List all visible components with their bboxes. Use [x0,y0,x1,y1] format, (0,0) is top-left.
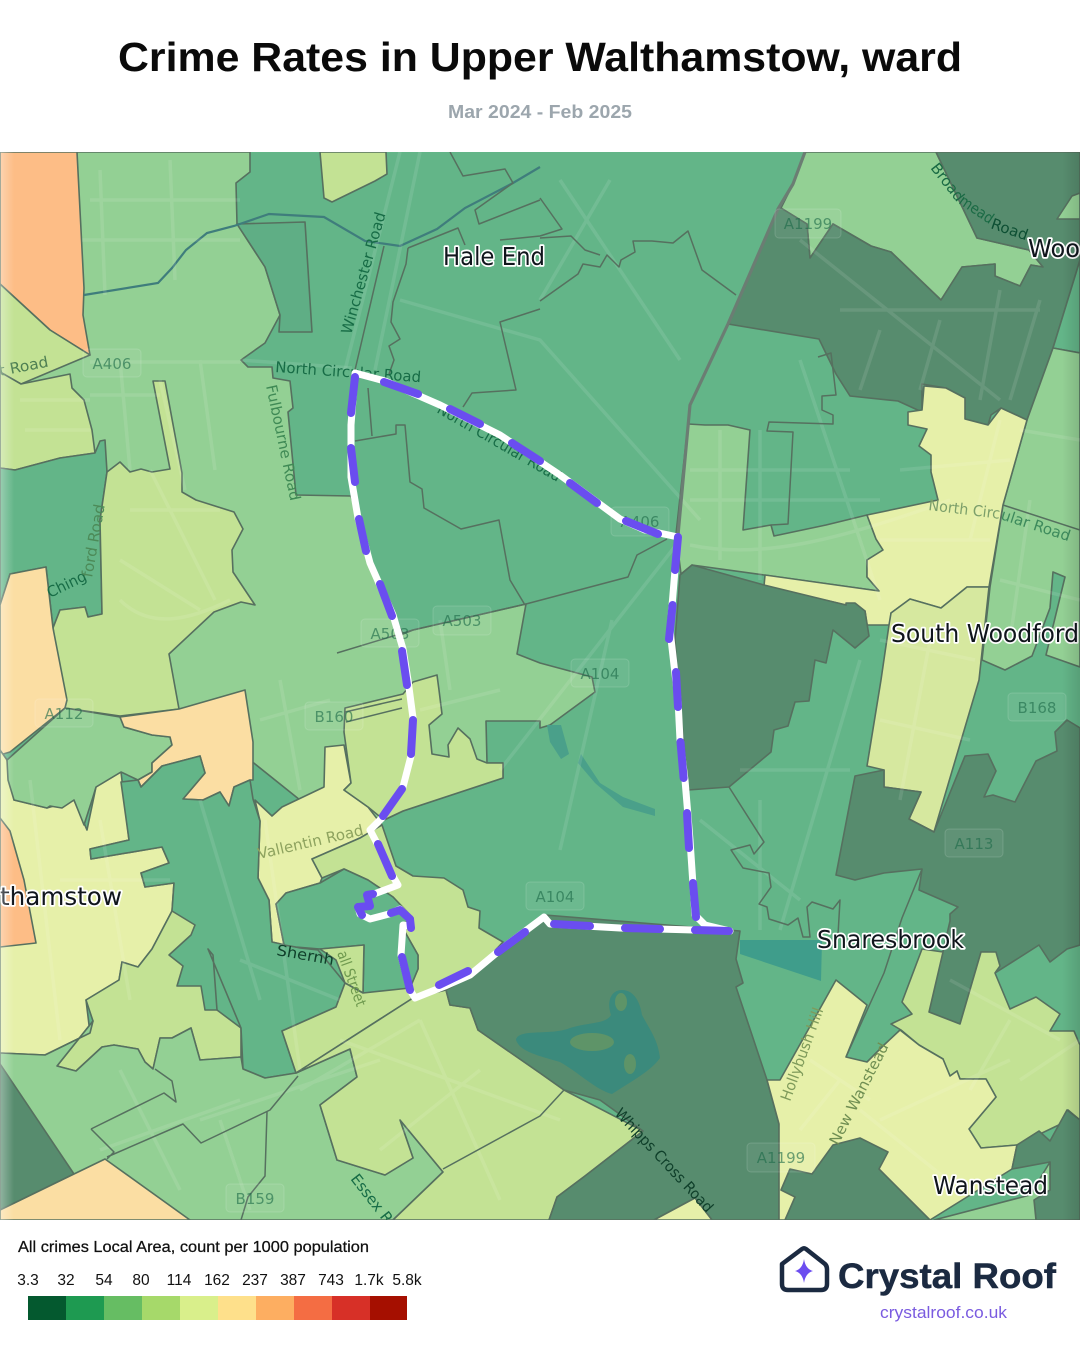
road name labels: ford Road [78,503,109,579]
place names: Hale End [443,242,545,271]
icon: house with star [780,1246,830,1292]
crime rate zones [0,152,1080,1220]
road name labels [0,159,1073,1227]
choropleth map [0,152,1080,1220]
road name labels: ular Road [999,506,1073,545]
road name labels: Broad [927,159,968,205]
road number shields: A1199 [757,1149,805,1167]
road number shields [35,209,1066,1212]
legend scale values: 162 [204,1272,230,1289]
road name labels: North Circular Road [275,358,422,386]
road name labels: North Circular Road [434,400,564,485]
legend scale values: 3.3 [17,1272,39,1289]
legend scale values: 80 [132,1272,150,1289]
internal ward boundaries [91,152,1080,1220]
road number shields: A104 [536,888,574,906]
legend scale values: 1.7k [354,1272,384,1289]
road name labels: New Wanstead [826,1040,892,1148]
road name labels: Whipps Cross Road [611,1104,717,1216]
place names [0,234,1080,1200]
road name labels: Hollybush Hill [777,1005,827,1103]
legend scale values: 5.8k [392,1272,422,1289]
water: lakes and stream [84,167,822,1094]
road number shields: A406 [93,355,131,373]
title: Crime Rates in Upper Walthamstow, ward [118,34,962,80]
road number shields: A503 [443,612,481,630]
road number shields: A113 [955,835,993,853]
legend colour bar [28,1296,407,1320]
base area [0,152,1080,1220]
road name labels: all Street [333,948,370,1009]
road name labels: mead [956,191,997,228]
road number shields: B168 [1018,699,1056,717]
main road boundary [678,152,805,535]
legend title: All crimes Local Area, count per 1000 population [18,1239,369,1256]
wordmark: Crystal Roof [838,1257,1056,1296]
logo: Crystal Roof [780,1246,1056,1322]
place names: Wanstead [933,1171,1048,1200]
legend scale values: 743 [318,1272,344,1289]
road number shields: B159 [236,1190,274,1208]
road number shields: A112 [45,705,83,723]
legend scale values: 237 [242,1272,268,1289]
road name labels: Fulbourne Road [262,383,304,502]
legend [17,1239,422,1320]
road name labels: Shernh [275,941,336,969]
road number shields: A104 [581,665,619,683]
street network [20,152,1080,1210]
road number shields: A1199 [784,215,832,233]
subtitle: date range: Mar 2024 - Feb 2025 [448,101,632,122]
road name labels: Road [989,215,1030,244]
place names: thamstow [0,882,122,911]
ward boundary: Upper Walthamstow [351,373,730,998]
road name labels: Ching [44,567,90,602]
road number shields: A503 [371,625,409,643]
legend scale values: 32 [57,1272,75,1289]
legend scale values: 54 [95,1272,113,1289]
place names: Snaresbrook [817,925,964,954]
road name labels: Winchester Road [338,210,390,336]
legend scale values: 114 [167,1272,192,1289]
road name labels: Vallentin Road [256,821,365,863]
road number shields: B160 [315,708,353,726]
legend scale values [17,1272,422,1289]
website url: crystalroof.co.uk [880,1303,1008,1322]
road number shields: A406 [621,513,659,531]
legend scale values: 387 [280,1272,306,1289]
road name labels: North Circ [928,496,1001,523]
